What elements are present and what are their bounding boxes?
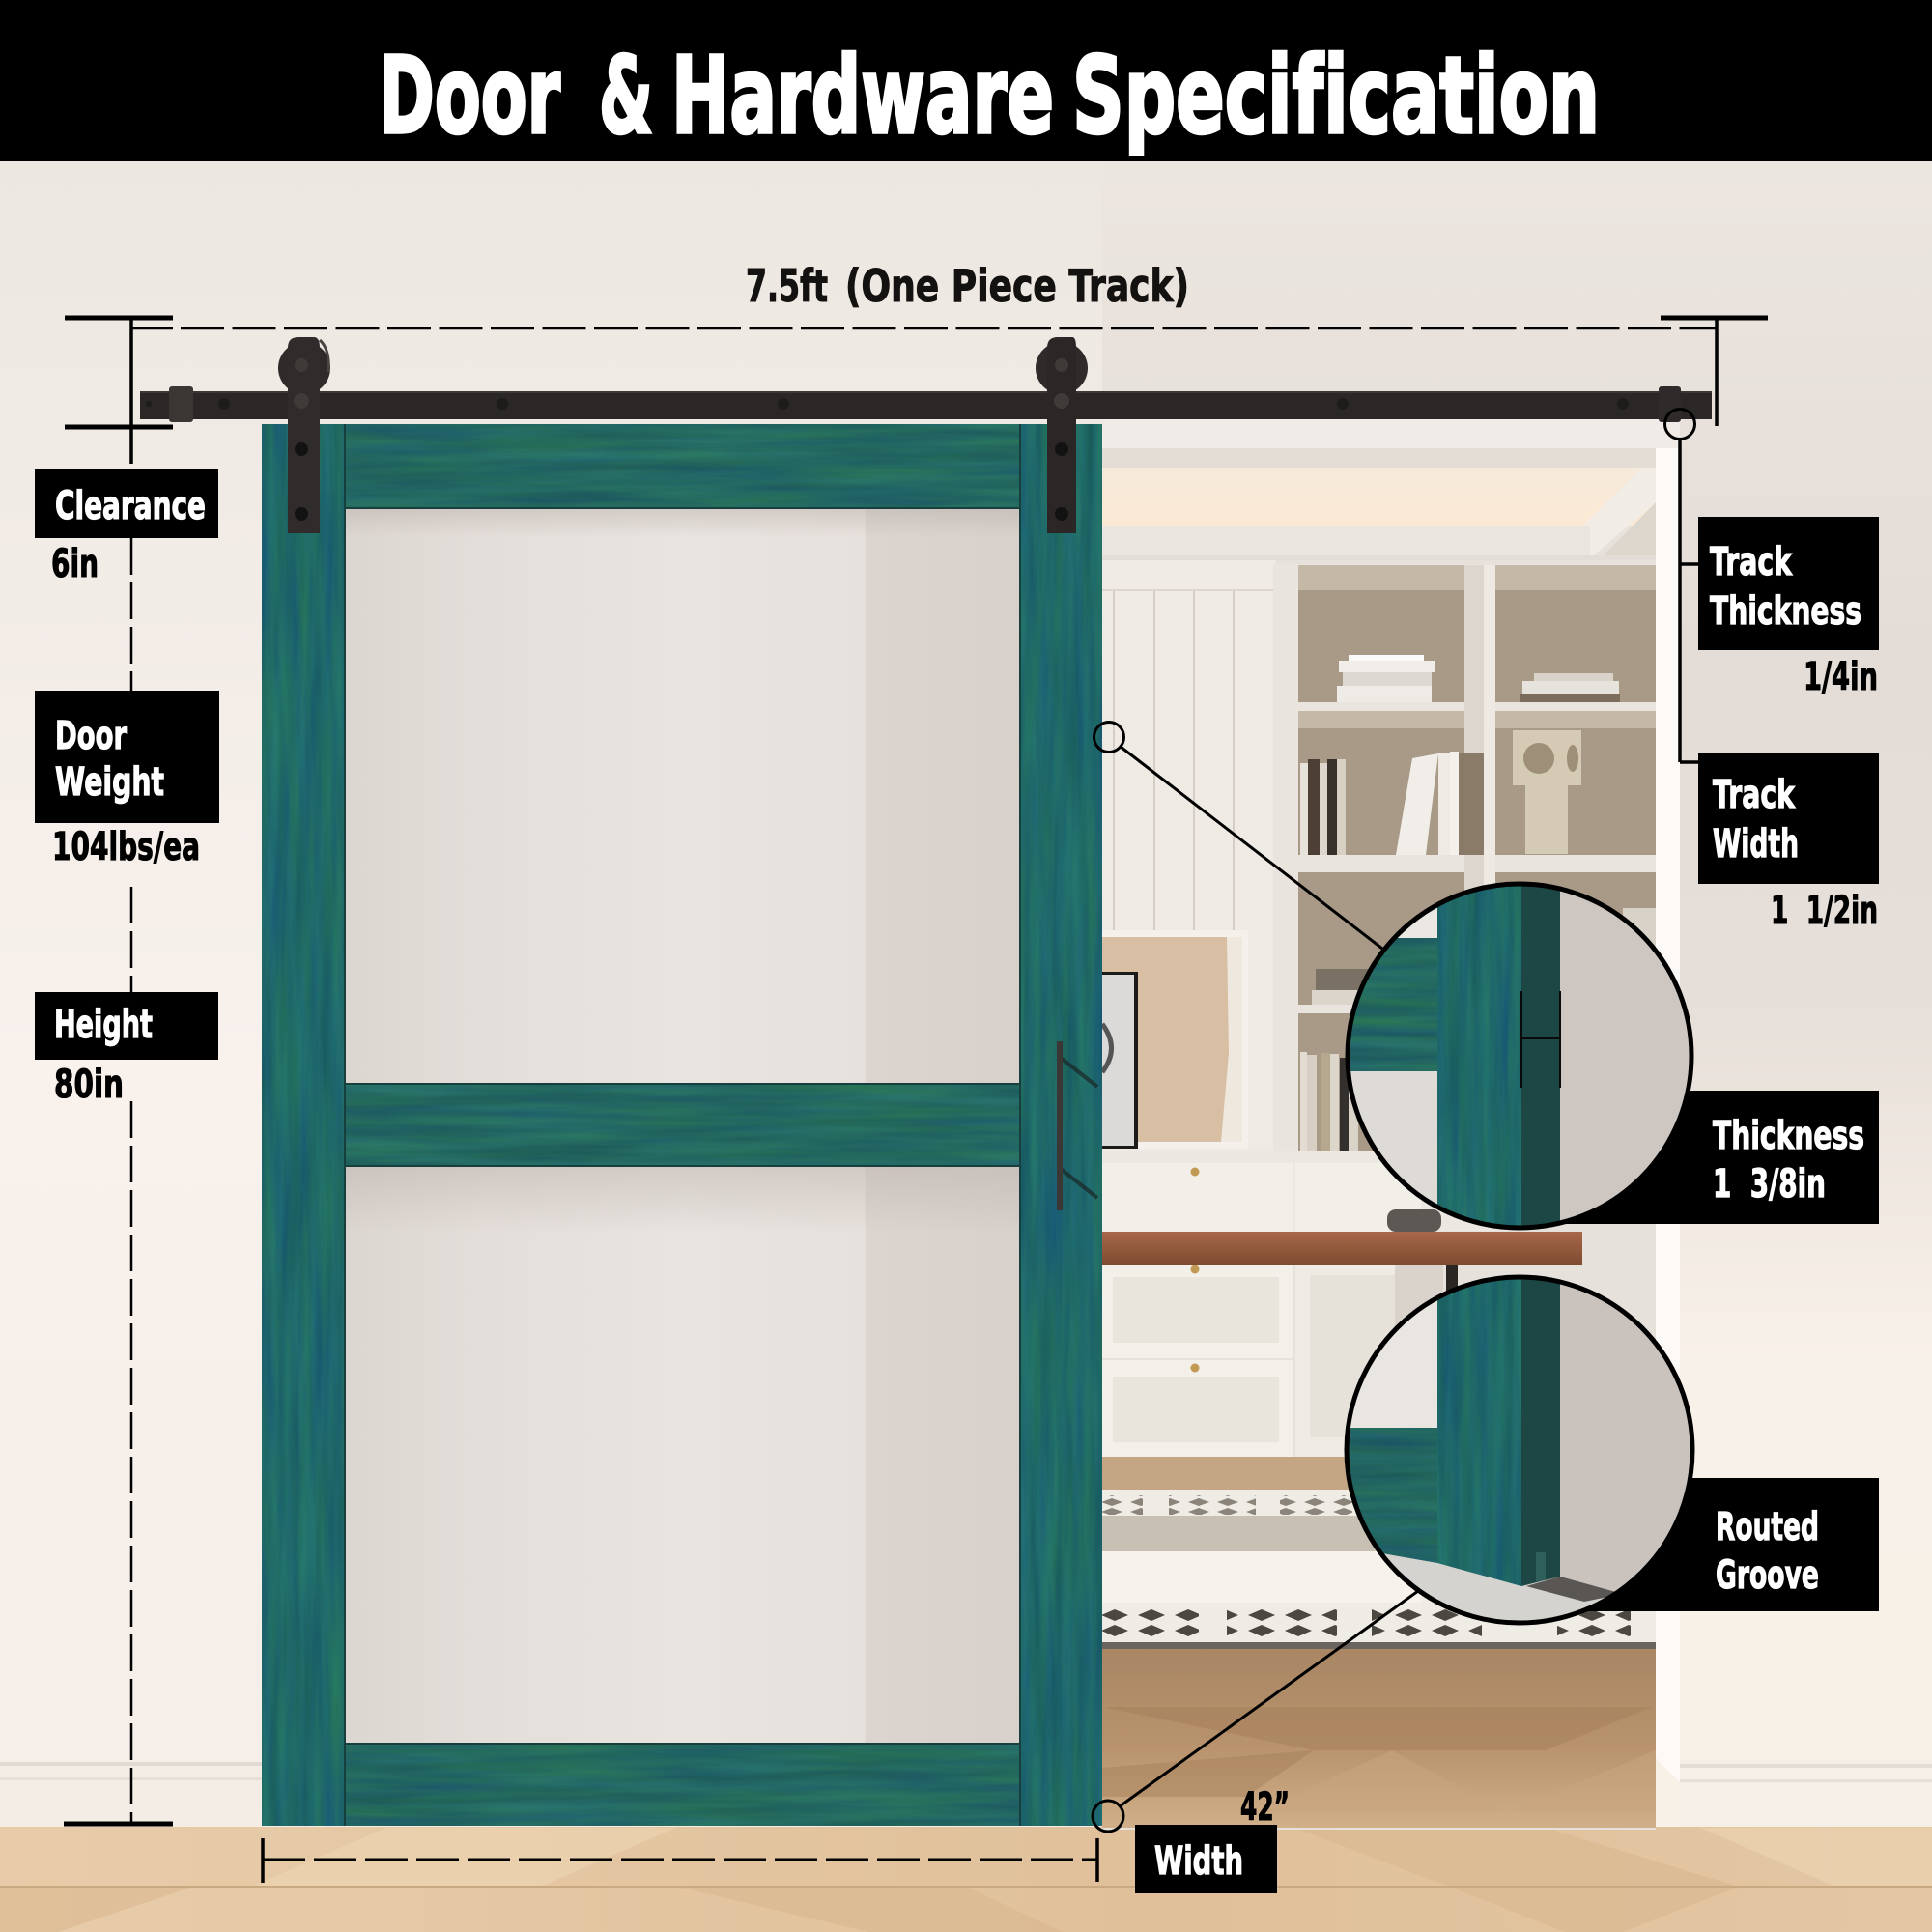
value: clearance 6in: 6in bbox=[51, 542, 99, 586]
label: track thickness: Track bbox=[1710, 540, 1793, 584]
value: track thickness: 1/4in bbox=[1804, 655, 1878, 699]
label: height bbox=[35, 992, 218, 1060]
value: door weight: 104lbs/ea bbox=[52, 825, 200, 869]
door glass panels bbox=[345, 508, 1020, 1744]
label: routed groove: Groove bbox=[1716, 1553, 1819, 1598]
dimension: door width bbox=[263, 1838, 1097, 1883]
label: track width: Width bbox=[1713, 822, 1799, 867]
door stiles bbox=[262, 424, 1102, 1826]
title: Hardware bbox=[671, 34, 1054, 157]
label: width bbox=[1135, 1825, 1277, 1893]
value: width 42 inches: 42” bbox=[1240, 1785, 1290, 1830]
title: Door bbox=[379, 34, 560, 157]
door bbox=[262, 424, 1102, 1826]
room seen through opening bbox=[1102, 419, 1680, 1830]
label: clearance: Clearance bbox=[55, 484, 206, 528]
hanger left bbox=[278, 337, 330, 533]
door frame edge bbox=[1656, 448, 1680, 1782]
label: width: Width bbox=[1154, 1839, 1243, 1884]
label: thickness bbox=[1546, 1091, 1879, 1224]
label: track thickness bbox=[1698, 517, 1879, 650]
label: routed groove: Routed bbox=[1716, 1505, 1819, 1549]
title bbox=[379, 34, 1600, 157]
connector: track callouts bbox=[1665, 410, 1698, 762]
door handle bbox=[1057, 1041, 1097, 1210]
floor bbox=[0, 1827, 1932, 1932]
label: thickness: 1 3/8in bbox=[1713, 1162, 1826, 1207]
label: clearance bbox=[35, 469, 218, 538]
label: thickness: Thickness bbox=[1713, 1114, 1864, 1158]
connector: thickness callout bbox=[1094, 723, 1382, 949]
dimension: door height bbox=[64, 538, 173, 1824]
label: track width bbox=[1698, 753, 1879, 884]
cabinets bbox=[1102, 1151, 1518, 1490]
hanger right bbox=[1036, 337, 1088, 533]
dimension: track length bbox=[65, 318, 1768, 464]
label: door weight bbox=[35, 691, 219, 823]
track length label bbox=[746, 260, 1189, 312]
label: track thickness: Thickness bbox=[1710, 589, 1861, 634]
bookcase bbox=[1273, 564, 1656, 1183]
track length label: 7.5ft bbox=[746, 260, 828, 312]
title bar bbox=[0, 0, 1932, 161]
detail circle: door thickness bbox=[1343, 879, 1700, 1236]
table bbox=[1102, 1209, 1582, 1304]
art frame bbox=[1102, 930, 1248, 1149]
wood floor in room bbox=[1102, 1649, 1656, 1828]
track rail bbox=[140, 386, 1712, 422]
track length label: (One Piece Track) bbox=[845, 260, 1189, 312]
connector: routed groove callout bbox=[1093, 1591, 1418, 1832]
label: height: Height bbox=[54, 1003, 153, 1047]
door rails bbox=[345, 424, 1020, 1826]
label: door weight: Door bbox=[55, 714, 127, 758]
rug bbox=[1102, 1490, 1656, 1649]
value: track width: 1 1/2in bbox=[1771, 889, 1878, 933]
label: track width: Track bbox=[1713, 773, 1796, 817]
label: routed groove bbox=[1546, 1478, 1879, 1611]
detail circle: routed groove bbox=[1338, 1273, 1700, 1633]
title: & bbox=[599, 34, 653, 157]
label: door weight: Weight bbox=[55, 760, 164, 805]
value: height: 80in bbox=[54, 1063, 124, 1107]
title: Specification bbox=[1072, 34, 1600, 157]
